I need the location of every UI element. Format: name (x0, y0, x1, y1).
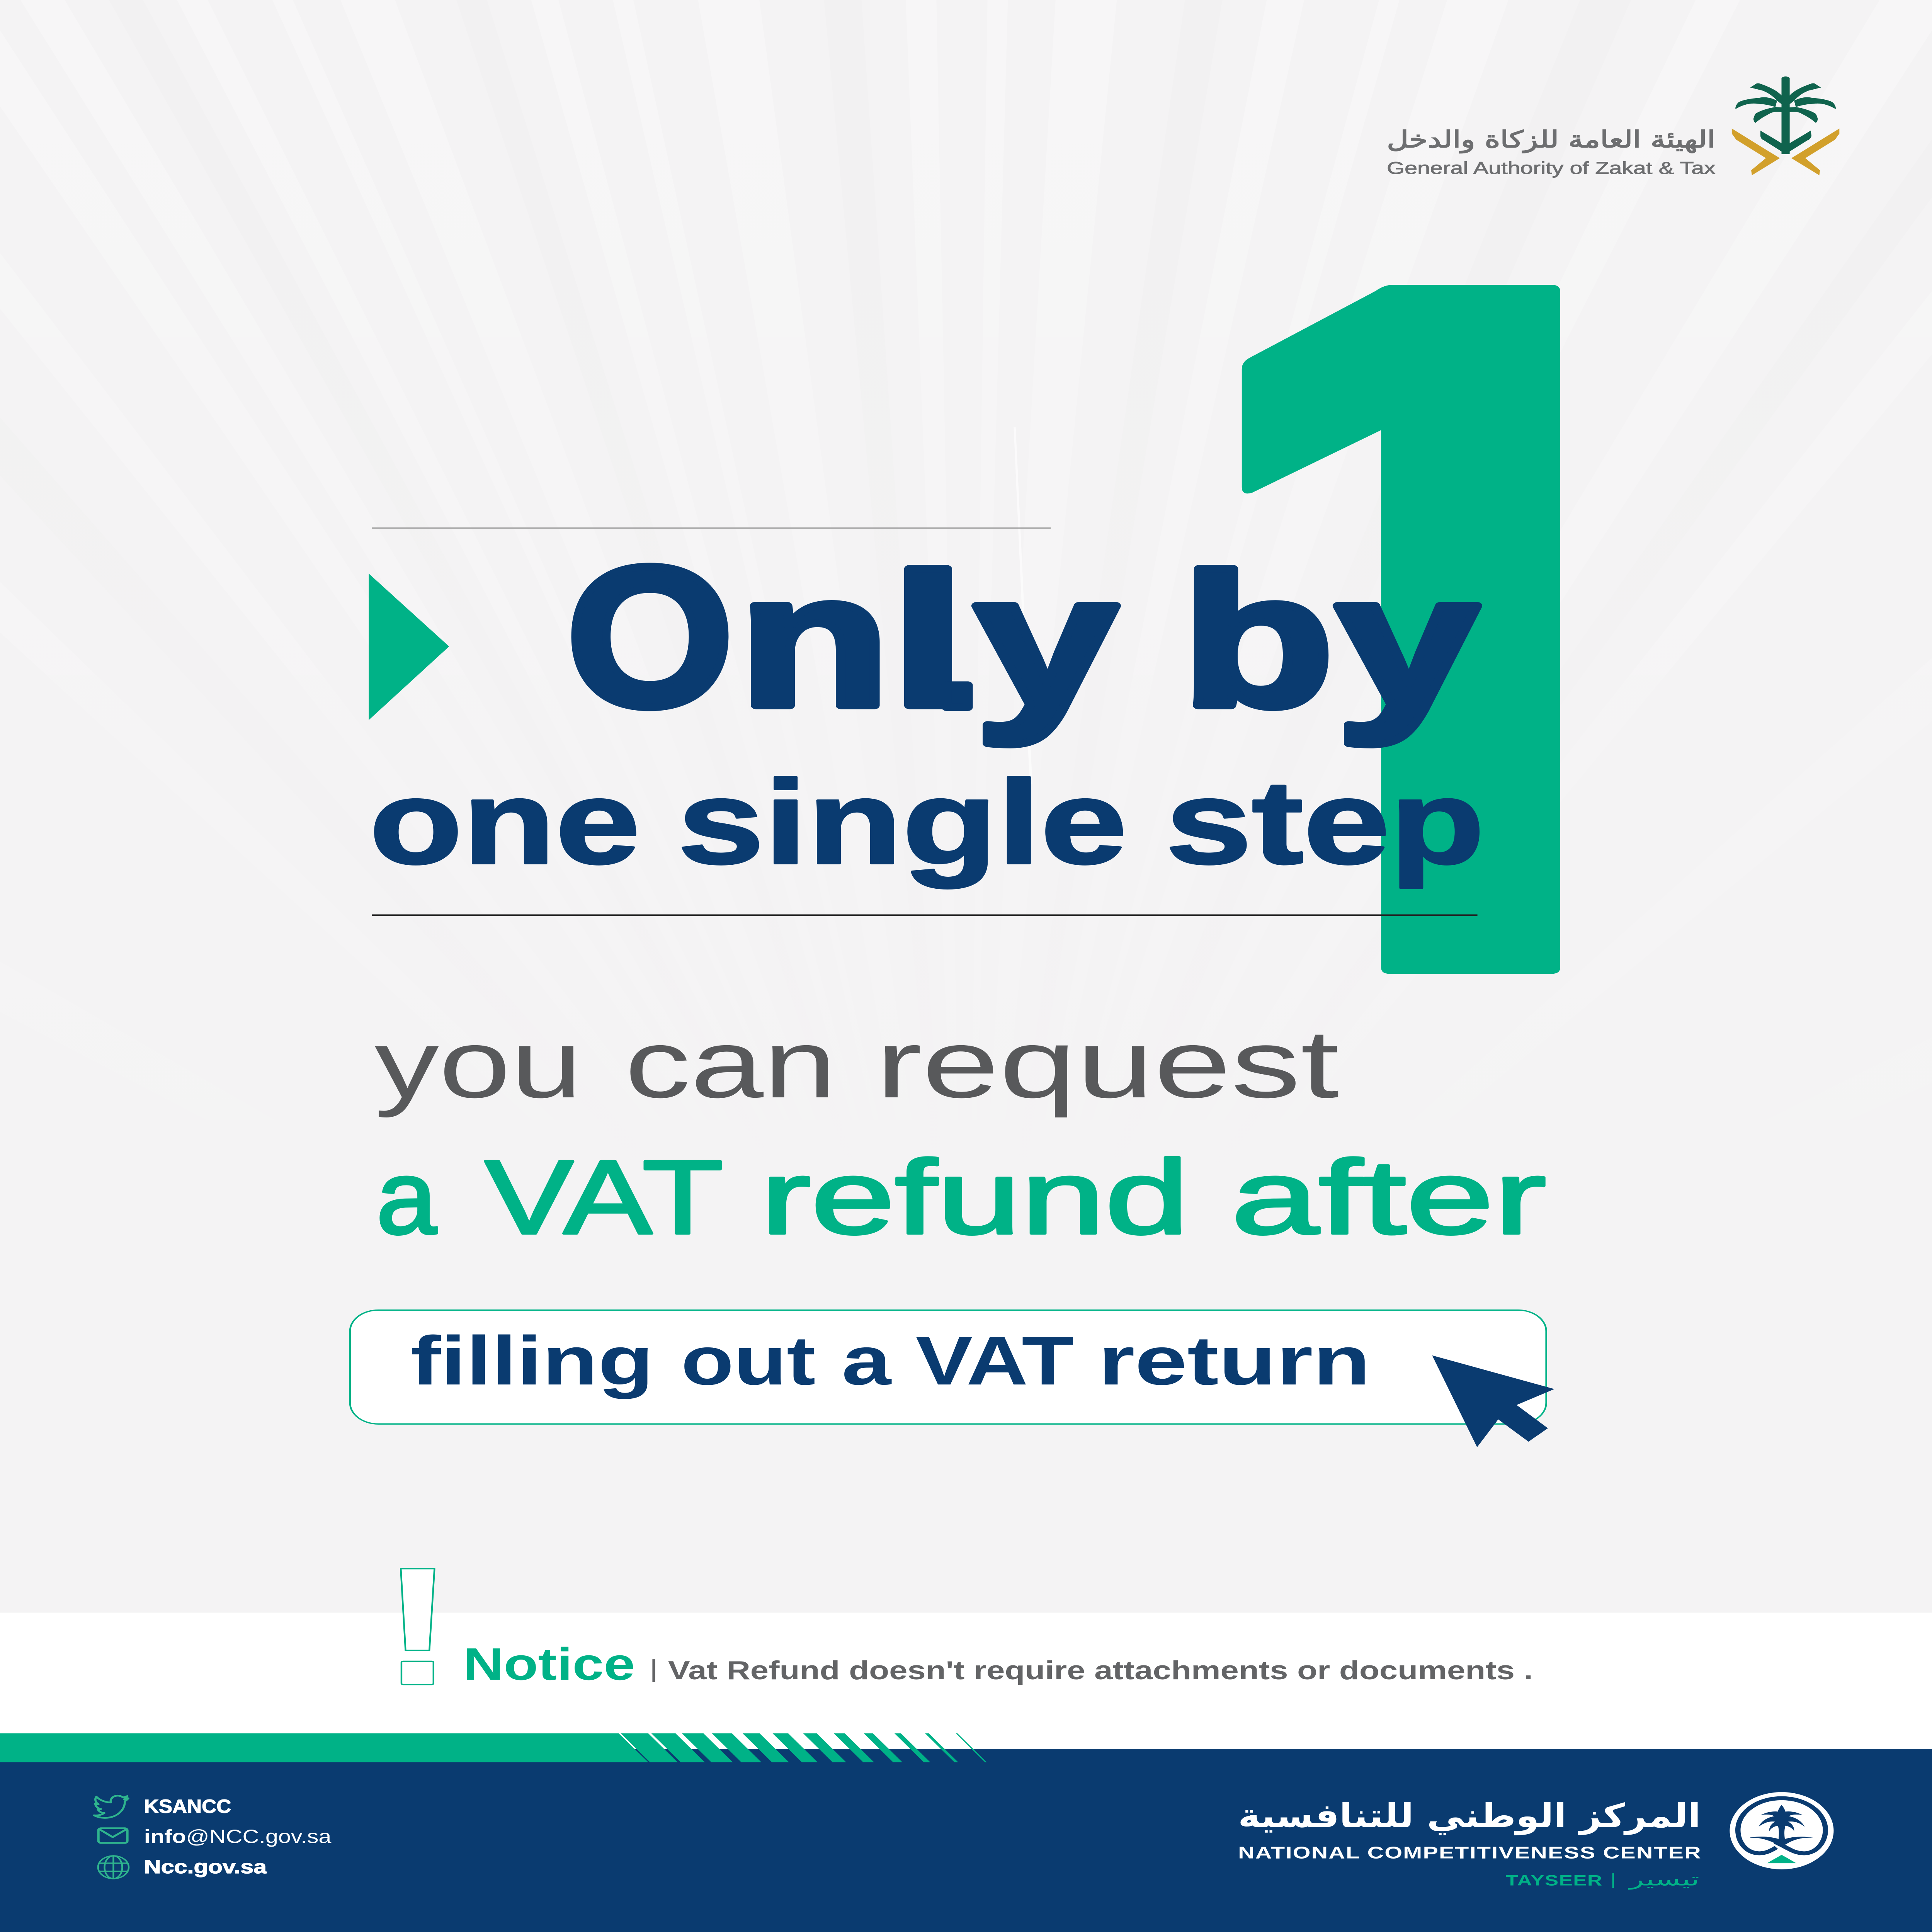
callout text: filling out a VAT return (410, 1322, 1371, 1399)
heading: Only by (566, 526, 1480, 748)
heading: one single step (369, 756, 1485, 889)
icon: palm emblem (1732, 77, 1839, 175)
text: you can request (374, 1010, 1340, 1119)
big numeral 1 (1242, 285, 1560, 974)
logo english name: General Authority of Zakat & Tax (1387, 158, 1716, 178)
callout text: filling out a VAT return: return (1098, 1322, 1371, 1399)
tayseer divider (1612, 1873, 1614, 1888)
text: a VAT refund after: refund (761, 1139, 1189, 1256)
lower rule (372, 914, 1478, 916)
logo: General Authority of Zakat and Tax (1387, 77, 1839, 178)
contact: twitter handle: KSANCC (144, 1796, 231, 1817)
callout box (350, 1310, 1546, 1424)
text: you can request: you (374, 1010, 582, 1119)
text: a VAT refund after: after (1231, 1139, 1546, 1256)
text: a VAT refund after (376, 1139, 1546, 1256)
tayseer arabic: تيسير (1628, 1869, 1699, 1889)
contact: website: Ncc.gov.sa (144, 1856, 267, 1878)
heading: Only by: y (975, 535, 1119, 747)
white notice band (0, 1613, 1932, 1749)
callout text: filling out a VAT return: out (681, 1322, 816, 1399)
heading: one single step: single (678, 756, 1127, 889)
icon: twitter (94, 1796, 128, 1818)
text: a VAT refund after: a (376, 1139, 437, 1256)
heading: Only by: l (891, 535, 966, 745)
callout text: filling out a VAT return: filling (410, 1322, 654, 1399)
callout text: filling out a VAT return: VAT (916, 1322, 1074, 1399)
english center name: NATIONAL COMPETITIVENESS CENTER (1238, 1844, 1701, 1862)
heading: one single step: one (369, 756, 640, 889)
logo: National Competitiveness Center (1238, 1792, 1833, 1889)
logo arabic name: الهيئة العامة للزكاة والدخل (1387, 126, 1716, 153)
tayseer label: TAYSEER (1506, 1872, 1602, 1889)
notice heading: Notice (463, 1639, 635, 1689)
notice text: Vat Refund doesn't require attachments or documents . (668, 1656, 1533, 1685)
icon: mouse cursor arrow (1432, 1355, 1554, 1447)
arabic center name: المركز الوطني للتنافسية (1238, 1796, 1701, 1835)
icon: globe (98, 1856, 129, 1879)
contact list (94, 1796, 332, 1879)
heading: Only by: y (1336, 535, 1480, 747)
text: a VAT refund after: VAT (485, 1139, 723, 1256)
top thin rule (372, 527, 1051, 529)
callout text: filling out a VAT return: a (842, 1322, 892, 1399)
heading: one single step: step (1165, 756, 1485, 889)
heading: Only by: b (1182, 535, 1334, 745)
icon: center emblem (1730, 1792, 1833, 1869)
contact: email: info@NCC.gov.sa (144, 1826, 332, 1847)
text: you can request: can (625, 1010, 837, 1118)
icon: mail (99, 1828, 128, 1843)
green striped bar (0, 1733, 987, 1762)
icon: green triangle marker (369, 573, 449, 720)
text: you can request: request (876, 1010, 1340, 1119)
heading: Only by: O (566, 526, 733, 748)
navy footer (0, 1749, 1932, 1932)
heading: Only by: n (738, 535, 890, 745)
icon: exclamation mark (401, 1569, 434, 1685)
